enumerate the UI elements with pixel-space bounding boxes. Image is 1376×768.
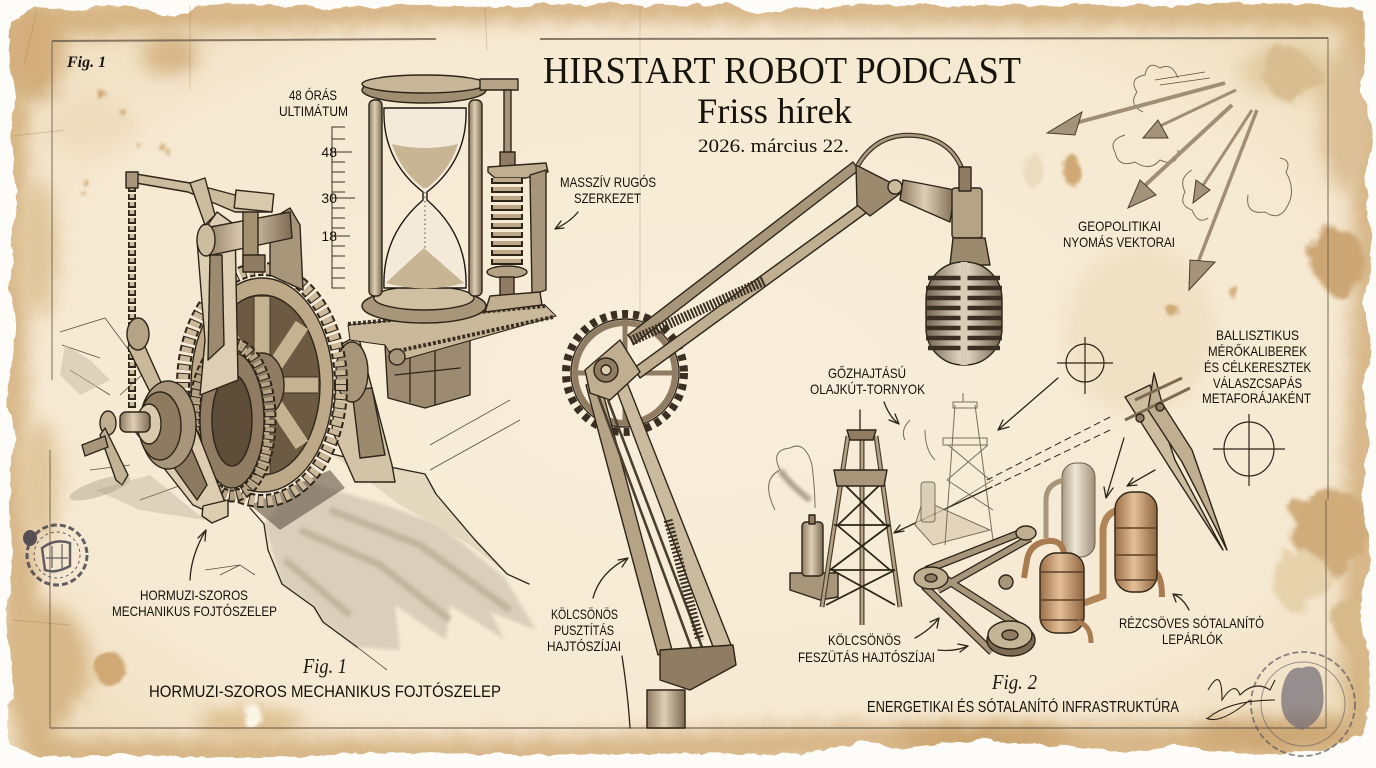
label: geopolitical pressure vectors — [1063, 218, 1175, 250]
stamp: right heart seal with signature — [1206, 652, 1355, 756]
label: Hormuz valve callout: MECHANIKUS FOJTÓSZELEP — [112, 603, 277, 619]
label: ballistic calipers and crosshairs: MÉRŐKALIBEREK — [1208, 343, 1308, 359]
arrows: caliper and crosshair pointers — [894, 378, 1155, 533]
copper tank rear — [1115, 492, 1157, 592]
date: 2026. március 22. — [698, 136, 849, 157]
arm spring — [631, 281, 764, 341]
illustration: desalination stills — [999, 463, 1162, 643]
label: massive spring structure — [555, 174, 656, 229]
chart: 48-hour scale — [321, 127, 355, 288]
caption: figure 2 — [867, 670, 1180, 716]
copper pipes — [1024, 541, 1064, 578]
label: steam oil derricks: GŐZHAJTÁSÚ — [828, 365, 906, 381]
sand — [386, 144, 464, 288]
label: Hormuz valve callout: HORMUZI-SZOROS — [140, 587, 248, 603]
label: geopolitical pressure vectors: NYOMÁS VEKTORAI — [1063, 234, 1175, 250]
crank handle — [82, 411, 128, 485]
label: 48-hour ultimatum — [279, 87, 348, 119]
storm clouds — [1113, 65, 1292, 220]
chart: 48-hour scale: 30 — [321, 190, 337, 206]
pillars — [369, 100, 382, 296]
label: mutual tension drive belts: FESZÜTÁS HAJTÓSZÍJAI — [798, 648, 935, 665]
icon: crosshair lower — [1213, 414, 1285, 486]
illustration: Hormuz mechanical throttle valve — [82, 172, 395, 523]
caption: figure 1 — [149, 654, 501, 701]
top plate — [362, 77, 486, 103]
label: Hormuz valve callout — [112, 530, 277, 619]
copper tank front — [1040, 553, 1091, 643]
microphone head — [926, 262, 1002, 365]
label: mutual destruction drive belts — [547, 558, 628, 654]
label: massive spring structure: SZERKEZET — [574, 190, 641, 206]
tensioner arm — [128, 332, 178, 428]
chart: 48-hour scale: 18 — [321, 228, 337, 244]
illustration: chain drive and base under hourglass — [348, 305, 556, 408]
label: mutual destruction drive belts: PUSZTÍTÁS — [554, 622, 614, 638]
chart: 48-hour scale: 48 — [321, 144, 337, 160]
label: mutual destruction drive belts: HAJTÓSZÍJAI — [547, 638, 621, 654]
illustration: mutual tension drive belt — [914, 526, 1036, 656]
label: geopolitical pressure vectors: GEOPOLITIKAI — [1078, 218, 1161, 234]
illustration: 48-hour hourglass — [362, 75, 518, 323]
spring rod and arm — [480, 79, 518, 90]
stamp: left round seal — [23, 525, 87, 585]
base — [660, 645, 736, 690]
illustration: geopolitical pressure vector arrows — [1047, 65, 1292, 290]
valve — [999, 575, 1013, 589]
cord — [858, 135, 965, 180]
arm joint — [856, 165, 905, 216]
main title: HIRSTART ROBOT PODCAST — [543, 50, 1021, 92]
label: ballistic calipers and crosshairs: METAFORÁJAKÉNT — [1202, 390, 1311, 406]
label: steam oil derricks: OLAJKÚT-TORNYOK — [810, 381, 926, 397]
illustration: ballistic caliper — [987, 373, 1227, 550]
icon: crosshair upper — [1057, 337, 1113, 394]
cross shaft — [205, 212, 292, 256]
title block — [543, 50, 1021, 157]
glass tank — [1062, 463, 1095, 557]
upright frame — [197, 212, 238, 395]
upper arm bars — [628, 162, 859, 344]
label: ballistic calipers and crosshairs: BALLISZTIKUS — [1216, 327, 1299, 343]
illustration: steam oil derrick near — [769, 410, 900, 625]
base plate — [362, 289, 486, 323]
ground shadow — [95, 475, 205, 520]
inner gear — [194, 344, 270, 496]
arm gear — [566, 314, 684, 432]
label: copper-pipe desalination stills: LEPÁRLÓK — [1162, 631, 1224, 647]
label: massive spring structure: MASSZÍV RUGÓS — [560, 174, 656, 190]
label: 48-hour ultimatum: 48 ÓRÁS — [289, 87, 337, 103]
lever arm — [130, 173, 272, 212]
fold lines — [12, 5, 640, 625]
caption: figure 2: Fig. 2 — [991, 670, 1037, 694]
illustration: podcast microphone boom arm — [566, 135, 1002, 728]
illustration: terrain and chasm — [60, 318, 536, 670]
glass bulb — [384, 108, 466, 288]
label: mutual tension drive belts — [798, 618, 968, 665]
caption: figure 1: Fig. 1 — [302, 654, 347, 678]
caption: top-left figure tag: Fig. 1 — [66, 54, 106, 71]
label: mutual destruction drive belts: KÖLCSÖNÖS — [551, 605, 618, 622]
label: steam oil derricks — [810, 365, 926, 424]
label: ballistic calipers and crosshairs: VÁLASZCSAPÁS — [1213, 375, 1302, 391]
caption: figure 1: HORMUZI-SZOROS MECHANIKUS FOJTÓSZELEP — [149, 682, 501, 701]
large gear wheel — [183, 269, 341, 501]
caption: figure 2: ENERGETIKAI ÉS SÓTALANÍTÓ INFRASTRUKTÚRA — [867, 699, 1180, 716]
lower arm struts — [586, 382, 672, 655]
label: ballistic calipers and crosshairs: ÉS CÉLKERESZTEK — [1204, 359, 1312, 375]
rear bearing bracket — [332, 335, 395, 482]
illustration: steam oil derrick far — [903, 393, 993, 545]
subtitle: Friss hírek — [697, 91, 852, 131]
pivot plate — [585, 340, 640, 400]
chain — [126, 172, 138, 410]
label: mutual tension drive belts: KÖLCSÖNÖS — [828, 631, 901, 648]
label: ballistic calipers and crosshairs — [1202, 327, 1312, 406]
illustration: massive spring structure — [485, 163, 548, 312]
label: 48-hour ultimatum: ULTIMÁTUM — [279, 103, 348, 119]
label: copper-pipe desalination stills: RÉZCSÖVES SÓTALANÍTÓ — [1119, 614, 1264, 631]
label: copper-pipe desalination stills — [1119, 594, 1264, 647]
front hub and bearing — [120, 381, 228, 523]
arrows — [1068, 83, 1225, 125]
